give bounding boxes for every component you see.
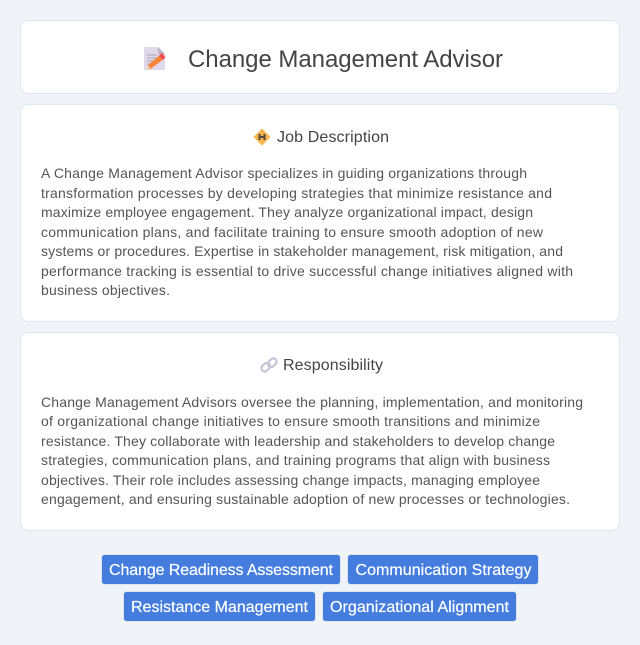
text block: responsibility <box>41 394 583 507</box>
text block: responsibility: objectives. Their role includes assessing change impacts, managing employee <box>41 472 540 488</box>
text block: responsibility: strategies, communication plans, and training programs that align with business <box>41 452 550 468</box>
heading: job description: Job Description <box>277 129 389 146</box>
tag: change readiness assessment: Change Readiness Assessment <box>109 562 334 579</box>
panel: title card <box>20 20 620 94</box>
tag: communication strategy <box>348 554 538 584</box>
text block: job description: systems or procedures. Expertise in stakeholder management, risk mitigation, and <box>41 243 563 259</box>
heading: responsibility: Responsibility <box>283 357 383 374</box>
text block: job description <box>41 165 573 298</box>
title: Change Management Advisor <box>188 46 503 73</box>
text block: responsibility: Change Management Advisors oversee the planning, implementation, and monitoring <box>41 394 583 410</box>
text block: responsibility: engagement, and ensuring sustainable adoption of new processes or technologies. <box>41 491 570 507</box>
text block: responsibility: of organizational change initiatives to ensure smooth transitions and minimize <box>41 413 540 429</box>
tag: communication strategy: Communication Strategy <box>356 562 532 579</box>
text block: job description: business objectives. <box>41 282 170 298</box>
icon: document with pencil <box>144 47 166 70</box>
icon: orange diamond <box>254 128 270 146</box>
tag: organizational alignment <box>322 592 516 622</box>
text block: job description: A Change Management Advisor specializes in guiding organizations through <box>41 165 527 181</box>
tag: resistance management: Resistance Management <box>131 599 309 616</box>
tag: change readiness assessment <box>102 554 340 584</box>
text block: job description: maximize employee engagement. They analyze organizational impact, design <box>41 204 533 220</box>
text block: responsibility: resistance. They collaborate with leadership and stakeholders to develop change <box>41 433 555 449</box>
text block: job description: transformation processes by developing strategies that minimize resistance and <box>41 185 552 201</box>
text block: job description: performance tracking is essential to drive successful change initiatives aligned with <box>41 263 573 279</box>
tag: resistance management <box>124 592 316 622</box>
icon: chain link <box>260 357 278 373</box>
text block: job description: communication plans, and facilitate training to ensure smooth adoption of new <box>41 224 544 240</box>
panel: responsibility <box>20 332 620 530</box>
tag: organizational alignment: Organizational Alignment <box>330 599 510 616</box>
panel: job description <box>20 104 620 322</box>
